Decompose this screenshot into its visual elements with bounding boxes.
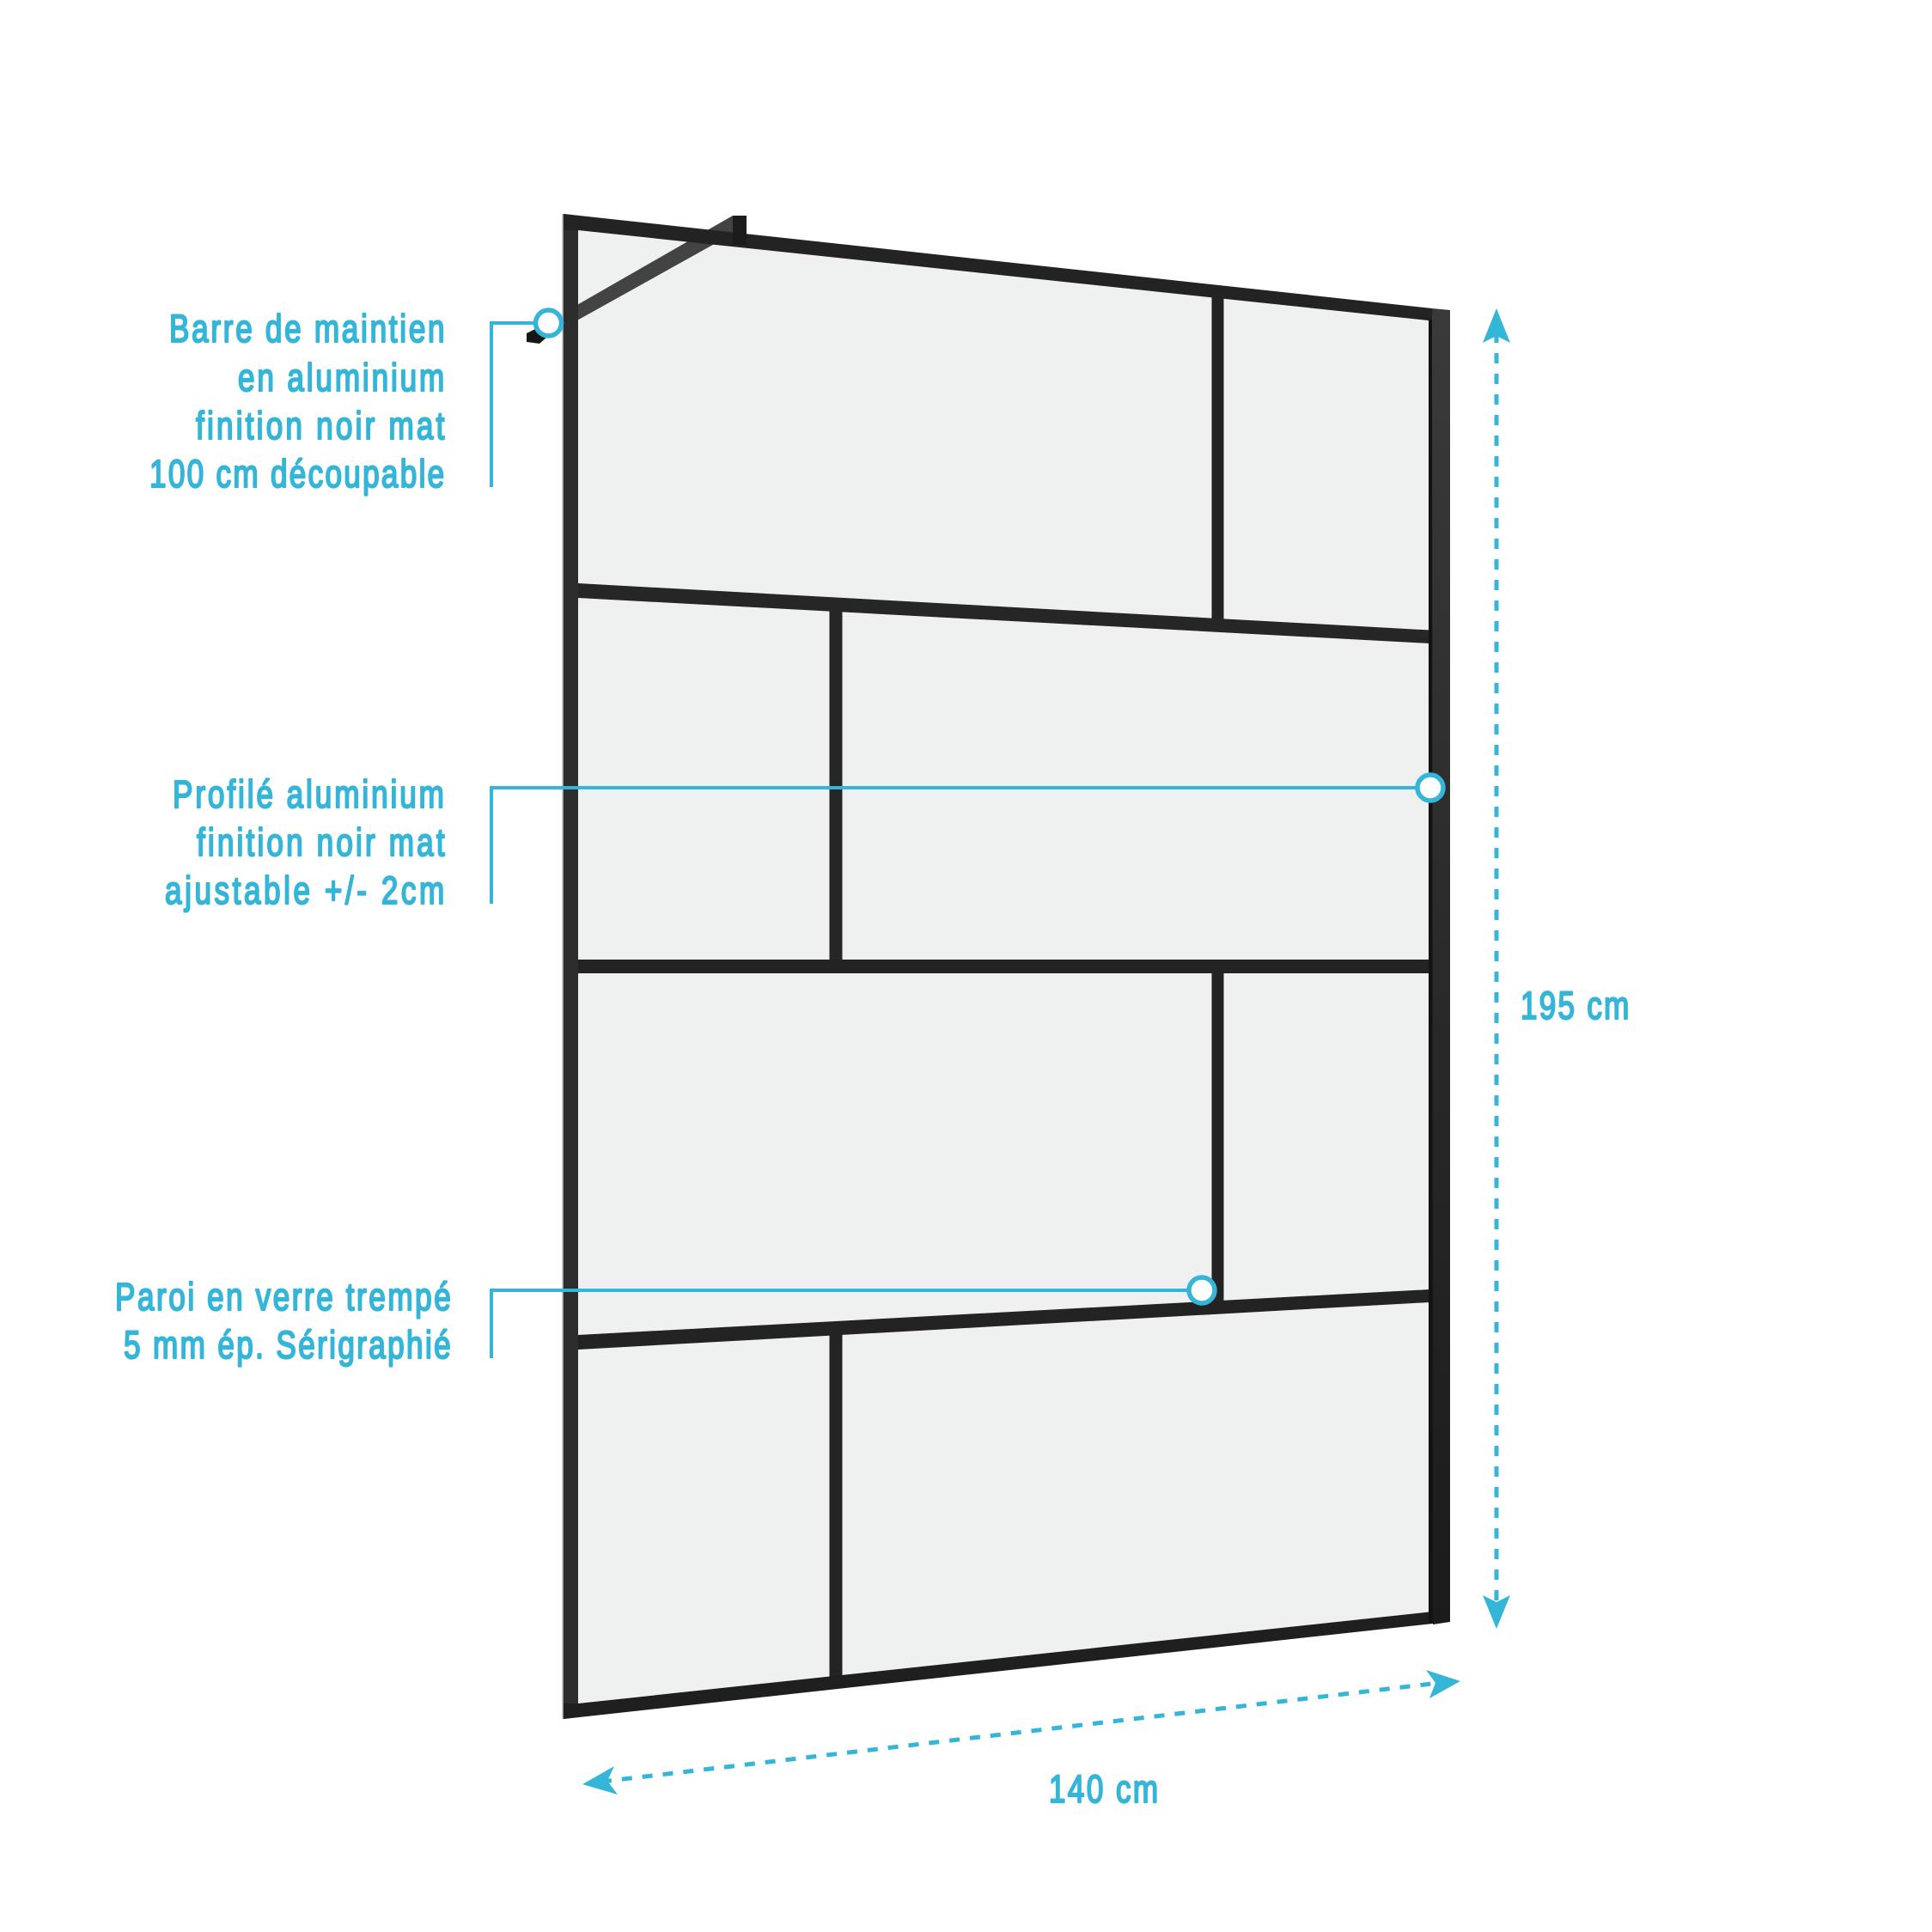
fourth rail [578,1289,1429,1350]
arrow: width dimension [582,1670,1460,1795]
callout: profilé aluminium [165,772,1443,912]
label text: Barre de maintien [169,307,445,350]
arrow: height dimension [1483,308,1510,1629]
label text: finition noir mat [196,404,444,448]
second rail [578,583,1429,643]
label text: ajustable +/- 2cm [165,868,444,912]
width label: 140 cm [1049,1767,1158,1811]
third rail [578,960,1429,973]
support bar [576,216,735,321]
glass pane [578,229,1429,1704]
third mullion [1211,966,1223,1306]
second mullion [830,601,842,966]
top rail [564,214,1432,321]
left frame [562,214,578,1719]
leader line [491,1290,1191,1358]
height label: 195 cm [1521,984,1629,1027]
label text [149,307,445,496]
support bar wall bracket [733,216,747,245]
right profile [1429,308,1450,1624]
leader line [491,788,1419,904]
marker [1189,1277,1215,1303]
callout: paroi en verre [115,1275,1215,1367]
label text: 100 cm découpable [149,452,444,496]
shower panel [527,214,1450,1719]
marker [1417,775,1443,801]
label text [115,1275,451,1367]
label text: Paroi en verre trempé [115,1275,451,1319]
upper mullion [1211,292,1223,623]
lower mullion [830,1327,842,1684]
label text: Profilé aluminium [173,772,444,816]
bottom rail [564,1612,1433,1719]
label text [165,772,445,912]
marker [536,310,562,336]
label text: finition noir mat [197,820,445,864]
label text: 5 mm ép. Sérigraphié [124,1323,451,1367]
callout: barre de maintien [149,307,562,496]
wall fixing block [527,329,546,344]
leader line [491,323,537,487]
label text: en aluminium [238,356,444,399]
